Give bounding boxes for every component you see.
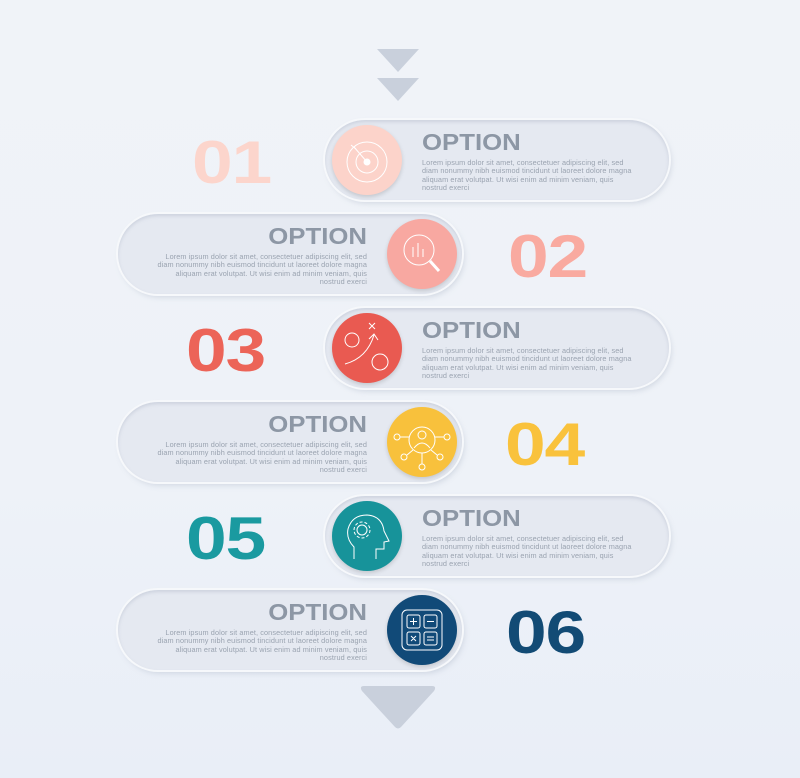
text 3: Lorem ipsum dolor sit amet, consectetuer adipiscing elit, sed diam nonummy nibh euismod tincidunt ut laoreet dolore magna aliquam erat volutpat. Ut wisi enim ad minim veniam, quis nostrud exerci [422, 346, 632, 380]
text 6: Lorem ipsum dolor sit amet, consectetuer adipiscing elit, sed diam nonummy nibh euismod tincidunt ut laoreet dolore magna aliquam erat volutpat. Ut wisi enim ad minim veniam, quis nostrud exerci [157, 628, 367, 662]
icon: target [332, 125, 402, 195]
row 4 [118, 402, 462, 482]
text 5 [422, 505, 632, 568]
icon: magnifier [387, 219, 457, 289]
top arrows [377, 49, 419, 101]
row 6 [118, 590, 462, 670]
row 3 [325, 308, 669, 388]
icon: head with gear [332, 501, 402, 571]
icon: network [387, 407, 457, 477]
text 2 [157, 223, 367, 286]
number 02: 02 [508, 223, 587, 290]
number 01: 01 [192, 129, 271, 196]
icon: calculator [387, 595, 457, 665]
row 2 [118, 214, 462, 294]
text 4 [157, 411, 367, 474]
text 3 [422, 317, 632, 380]
row 5 [325, 496, 669, 576]
icon: strategy [332, 313, 402, 383]
text 6: OPTION [268, 599, 367, 625]
number 03: 03 [186, 317, 265, 384]
number 04: 04 [505, 411, 584, 478]
text 3: OPTION [422, 317, 521, 343]
number 05: 05 [186, 505, 265, 572]
text 4: Lorem ipsum dolor sit amet, consectetuer adipiscing elit, sed diam nonummy nibh euismod tincidunt ut laoreet dolore magna aliquam erat volutpat. Ut wisi enim ad minim veniam, quis nostrud exerci [157, 440, 367, 474]
text 2: Lorem ipsum dolor sit amet, consectetuer adipiscing elit, sed diam nonummy nibh euismod tincidunt ut laoreet dolore magna aliquam erat volutpat. Ut wisi enim ad minim veniam, quis nostrud exerci [157, 252, 367, 286]
row 1 [325, 120, 669, 200]
bottom arrow [361, 686, 435, 728]
text 5: Lorem ipsum dolor sit amet, consectetuer adipiscing elit, sed diam nonummy nibh euismod tincidunt ut laoreet dolore magna aliquam erat volutpat. Ut wisi enim ad minim veniam, quis nostrud exerci [422, 534, 632, 568]
text 2: OPTION [268, 223, 367, 249]
text 6 [157, 599, 367, 662]
text 4: OPTION [268, 411, 367, 437]
text 1: OPTION [422, 129, 521, 155]
number 06: 06 [506, 599, 585, 666]
text 1: Lorem ipsum dolor sit amet, consectetuer adipiscing elit, sed diam nonummy nibh euismod tincidunt ut laoreet dolore magna aliquam erat volutpat. Ut wisi enim ad minim veniam, quis nostrud exerci [422, 158, 632, 192]
text 1 [422, 129, 632, 192]
text 5: OPTION [422, 505, 521, 531]
